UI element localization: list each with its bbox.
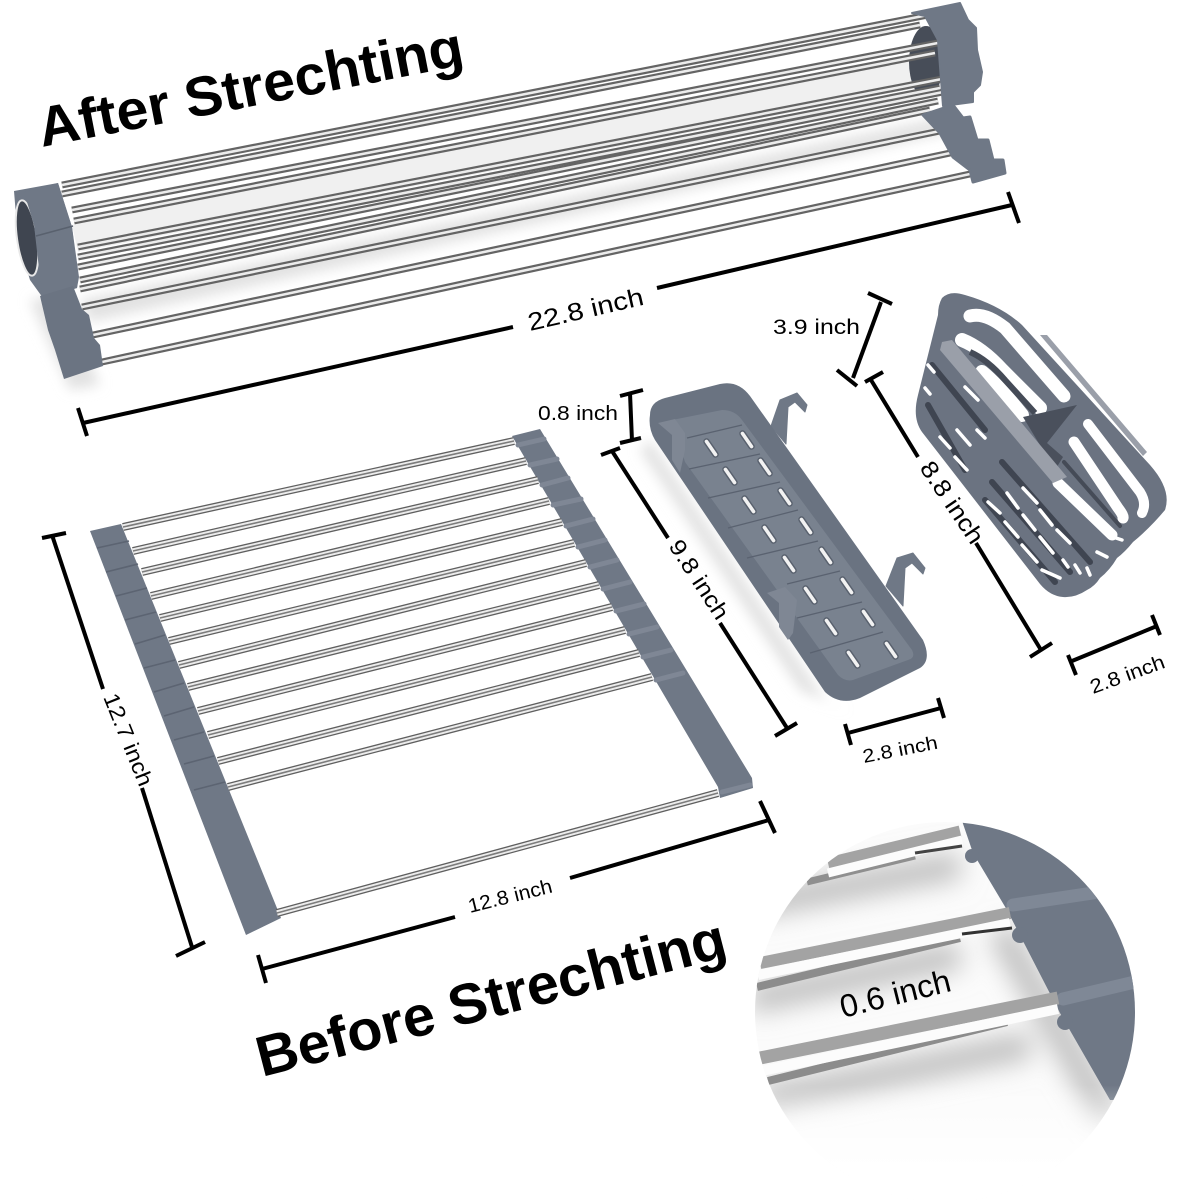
basket front dark slots [928, 365, 1090, 582]
basket back rail [1040, 335, 1147, 456]
basket inner dark band [970, 352, 1035, 413]
title: before stretching: Before Strechting [249, 907, 733, 1090]
label: 12.8 inch: 12.8 inch [466, 876, 555, 918]
soap tray [640, 383, 927, 712]
dimension: 3.9 inch [837, 293, 892, 386]
rolled rack right inner spool [909, 26, 943, 98]
label: 0.6 inch: 0.6 inch [836, 963, 954, 1025]
tray body [650, 383, 927, 701]
rolled rack (after stretching) [12, 3, 1005, 390]
rolled rack shadow [30, 55, 960, 390]
dimension: 2.8 inch (basket) [1068, 615, 1160, 675]
dimension: 0.8 inch [620, 390, 643, 443]
title: after stretching: After Strechting [32, 15, 468, 159]
tray clip near [767, 587, 797, 640]
basket front rail [940, 340, 1067, 483]
dimension: 12.7 inch [42, 533, 205, 956]
flat rack steel rods [123, 441, 718, 913]
tray shadow [640, 440, 850, 712]
dimension: 9.8 inch [601, 448, 797, 736]
basket back wall openings [962, 315, 1064, 415]
inset detail circle [755, 822, 1135, 1128]
label: 22.8 inch: 22.8 inch [525, 283, 646, 337]
tray drain slots [706, 434, 896, 666]
label: 9.8 inch: 9.8 inch [664, 535, 735, 624]
inset rod bumps [965, 849, 1073, 1030]
tray dividers [687, 425, 883, 653]
inset rod 3 [760, 998, 1058, 1081]
rolled rack left end cap [12, 183, 79, 298]
inset shadows [750, 865, 1110, 1120]
label: 8.8 inch: 8.8 inch [914, 456, 989, 549]
label: 2.8 inch (tray): 2.8 inch [861, 733, 940, 768]
tray hook far [771, 393, 807, 444]
inset rod 2 [757, 913, 1012, 987]
rolled rack steel rods [62, 15, 970, 362]
basket front small openings [925, 365, 1122, 578]
dimension: 12.8 inch [258, 801, 775, 983]
tray clip far [658, 419, 685, 473]
flat rack left bar [90, 524, 281, 935]
inset background [755, 822, 1135, 1200]
label: 12.7 inch: 12.7 inch [98, 690, 158, 790]
rolled rack left lower grip [40, 286, 103, 379]
tray floor [672, 410, 913, 680]
inset bar highlights [1013, 893, 1135, 999]
flat rack right bar [512, 429, 753, 798]
dimension: 8.8 inch [865, 372, 1052, 657]
dimension: 2.8 inch (tray) [845, 698, 944, 745]
dimension: 22.8 inch [78, 192, 1019, 436]
label: 2.8 inch (basket): 2.8 inch [1087, 651, 1168, 699]
flat rack (before stretching) [90, 429, 753, 935]
inset rod 1 [807, 831, 962, 882]
label: 3.9 inch: 3.9 inch [773, 316, 860, 339]
inset fade [778, 1090, 1118, 1128]
inset grey bar [962, 822, 1135, 1100]
label: 0.8 inch: 0.8 inch [538, 403, 618, 425]
rolled rack right end cap [912, 3, 982, 106]
basket body [916, 293, 1167, 597]
utensil basket [916, 293, 1167, 597]
basket divider [1023, 405, 1077, 470]
rolled rack right lower grip [923, 105, 1005, 182]
basket right openings [1058, 424, 1144, 535]
tray hook near [886, 553, 925, 606]
